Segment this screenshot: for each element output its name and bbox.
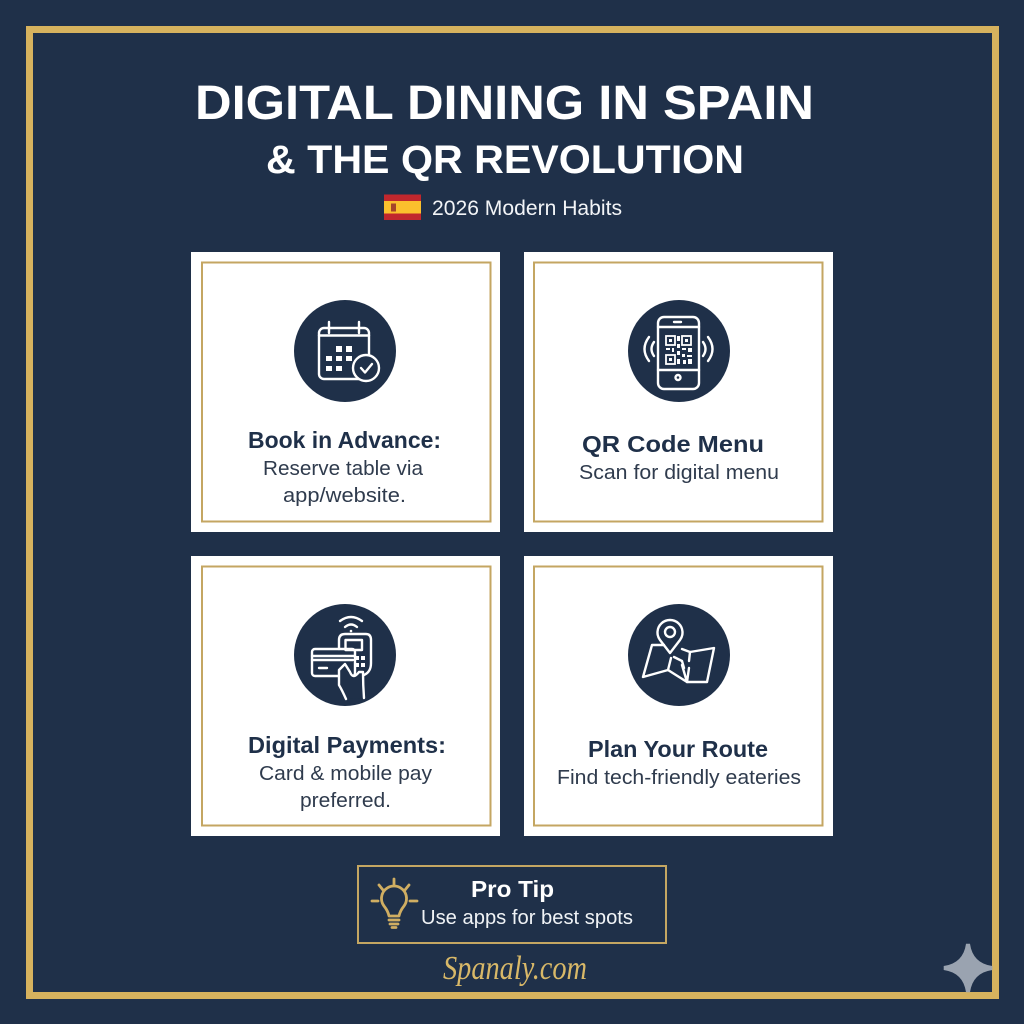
- body text: Use apps for best spots: [421, 907, 633, 929]
- tagline: 2026 Modern Habits: [432, 197, 622, 220]
- icon: Spanish flag: [384, 194, 421, 220]
- icon: four-point sparkle: [944, 944, 992, 992]
- body text: Scan for digital menu: [579, 462, 779, 484]
- brand wordmark: Spanaly.com: [443, 950, 587, 987]
- body text: Card & mobile pay: [259, 763, 432, 785]
- panel: plan your route: [524, 556, 833, 836]
- body text: Find tech-friendly eateries: [557, 767, 801, 789]
- heading: Digital Payments:: [248, 732, 446, 758]
- callout: pro tip: [358, 866, 666, 943]
- heading: Book in Advance:: [248, 427, 441, 453]
- panel: book in advance: [191, 252, 500, 532]
- heading: Plan Your Route: [588, 736, 768, 762]
- panel: QR code menu: [524, 252, 833, 532]
- heading: Pro Tip: [471, 876, 554, 902]
- icon: phone with QR code: [628, 300, 730, 402]
- icon: card, payment terminal and hand: [294, 604, 396, 706]
- body text: Reserve table via: [263, 458, 424, 480]
- icon: light bulb: [372, 879, 417, 928]
- icon: map with location pin: [628, 604, 730, 706]
- body text: app/website.: [283, 485, 406, 507]
- subtitle: & THE QR REVOLUTION: [266, 138, 744, 182]
- title: DIGITAL DINING IN SPAIN: [195, 77, 814, 130]
- body text: preferred.: [300, 790, 391, 812]
- panel: digital payments: [191, 556, 500, 836]
- icon: calendar with check mark: [294, 300, 396, 402]
- heading: QR Code Menu: [582, 431, 764, 457]
